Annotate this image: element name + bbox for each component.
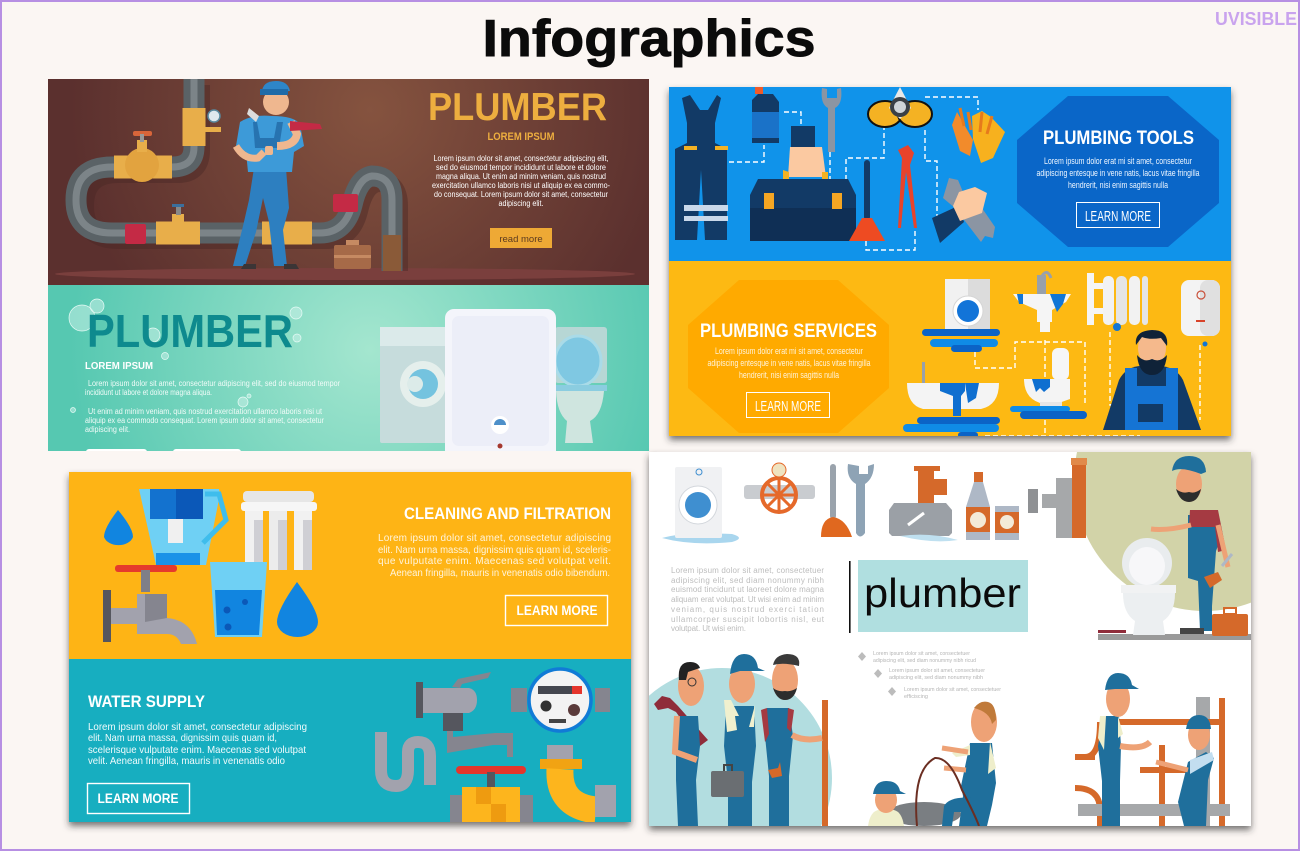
- icon: bathtub with puddle: [903, 362, 1000, 438]
- icon: S-trap pipe: [381, 732, 430, 786]
- icon: boiler: [1181, 280, 1220, 346]
- panel: cleaning and filtration yellow banner: [69, 472, 631, 659]
- button: learn more: LEARN MORE: [516, 603, 598, 618]
- text block: water supply body: scelerisque vulputate enim. Maecenas sed volutpat: [88, 744, 306, 756]
- text block: filtration body: Lorem ipsum dolor sit amet, consectetur adipiscing: [378, 533, 611, 544]
- text block: mint banner body: Lorem ipsum dolor sit amet, consectetur adipiscing elit, sed do eiusmod tempor: [88, 379, 340, 388]
- icon: overalls: [675, 95, 728, 240]
- text block: plumber paragraph: adipiscing elit, sed diam nonummy nibh: [671, 576, 824, 585]
- icon: respirator mask: [868, 87, 932, 127]
- heading: PLUMBING SERVICES: PLUMBING SERVICES: [700, 321, 877, 342]
- icon: gold valve bottom: [172, 204, 184, 222]
- text block: plumber paragraph: volutpat. Ut wisi enim.: [671, 624, 746, 633]
- subheading: LOREM IPSUM: LOREM IPSUM: [488, 131, 554, 143]
- text block: plumber paragraph: Lorem ipsum dolor sit amet, consectetuer: [671, 566, 824, 575]
- panel: water supply teal banner: [69, 659, 631, 822]
- button: read more: read more: [499, 234, 543, 245]
- icon: yellow elbow pipe: [540, 745, 616, 817]
- text block: brown banner body: sed do eiusmod tempor incididunt ut labore et dolore: [436, 163, 606, 172]
- illustration: team of three plumbers: [654, 654, 828, 826]
- text block: brown banner body: Lorem ipsum dolor sit amet, consectetur adipiscing elit,: [434, 154, 608, 163]
- text block: brown banner body: do consequat. Lorem ipsum dolor sit amet, consectetur: [434, 190, 608, 199]
- text block: filtration body: Aenean fringilla, mauris in venenatis odio bibendum.: [390, 568, 610, 579]
- icon: red handle valve: [450, 766, 533, 822]
- text block: plumber paragraph: aliquam erat volutpat. Ut wisi enim ad minim: [671, 595, 824, 604]
- connectors: dashed lines: [729, 97, 978, 250]
- text block: mint banner body: incididunt ut labore et dolore magna aliqua.: [85, 388, 212, 397]
- icon: gloves: [952, 108, 1005, 163]
- icon: washing machine: [662, 467, 739, 543]
- button: learn more: LEARN MORE: [755, 398, 821, 415]
- icon: gray spout tap: [416, 672, 513, 757]
- icon: bearded plumber: [1103, 330, 1201, 430]
- icon: small drop: [104, 510, 133, 545]
- list: diamond bullet notes: efficiscing: [904, 694, 928, 700]
- text block: plumber paragraph: veniam, quis nostrud exerci tation: [671, 605, 824, 614]
- connectors: dashed lines: [975, 332, 1200, 436]
- heading: PLUMBING TOOLS: PLUMBING TOOLS: [1043, 128, 1194, 149]
- button: learn more: [1076, 202, 1160, 228]
- icon: washing machine with puddle: [922, 279, 1000, 352]
- heading: CLEANING AND FILTRATION: CLEANING AND FILTRATION: [404, 504, 611, 523]
- illustration: plumber at toilet: [1098, 456, 1251, 640]
- text block: mint banner body: Ut enim ad minim veniam, quis nostrud exercitation ullamco laboris nisi ut: [88, 407, 323, 416]
- buttons: cropped white: [86, 449, 241, 451]
- text block: tools body: hendrerit, nisi enim sagittis nulla: [1068, 180, 1169, 191]
- panel: plumber flat illustration poster: [612, 349, 1300, 851]
- illustration: washing machine: [380, 327, 448, 443]
- icon: hand with wrench: [932, 178, 995, 243]
- text block: services body: [708, 346, 871, 381]
- text block: filtration body: que vulputate enim. Maecenas sed volutpat velit.: [378, 556, 611, 567]
- icon: red clamps: [125, 194, 358, 244]
- illustration: white water heater: [445, 309, 556, 459]
- icon: pressure gauge: [205, 110, 221, 132]
- title label: plumber: plumber: [864, 570, 1021, 616]
- heading: PLUMBER teal: PLUMBER: [87, 305, 293, 357]
- text block: water supply body: Lorem ipsum dolor sit amet, consectetur adipiscing: [88, 721, 307, 733]
- panel: plumbing tools blue banner: [669, 87, 1231, 261]
- panel: brown plumber banner: [48, 79, 649, 285]
- icon: pipe fittings: [1028, 458, 1087, 538]
- text block: water supply body: velit. Aenean fringilla, mauris in venenatis odio: [88, 755, 285, 767]
- panel: mint plumber banner: [48, 285, 649, 459]
- text block: mint banner body: [85, 379, 340, 434]
- panel: cleaning and water supply: [69, 472, 631, 822]
- illustration: toilet: [553, 327, 607, 443]
- logo: UVISIBLE: UVISIBLE: [1215, 9, 1297, 29]
- icon: toilet with puddle: [1010, 348, 1087, 419]
- icon: orange valve on pipe: [744, 463, 815, 512]
- illustration: worker at manhole: [868, 702, 997, 826]
- panel: plumbing tools and services: [669, 87, 1231, 438]
- text block: services body: Lorem ipsum dolor erat mi sit amet, consectetur: [715, 346, 863, 357]
- illustration: pipe network: [76, 79, 398, 271]
- text block: mint banner body: adipiscing elit.: [85, 425, 130, 434]
- button: read more: [490, 228, 552, 248]
- text block: brown banner body: exercitation ullamco laboris nisi ut aliquip ex ea commo-: [432, 181, 610, 190]
- icon: wrench: [848, 464, 874, 536]
- button: learn more: LEARN MORE: [1085, 208, 1151, 225]
- list: diamond bullet notes: adipiscing elit, sed diam nonummy nibh: [889, 675, 983, 681]
- heading: PLUMBER: PLUMBER: [428, 86, 607, 129]
- text block: services body: hendrerit, nisi enim sagittis nulla: [739, 370, 840, 381]
- icon: plunger: [821, 464, 852, 537]
- text block: water supply body: elit. Nam urna massa, dignissim quis quam id,: [88, 732, 277, 744]
- icon: water meter: [511, 669, 610, 731]
- badge: orange octagon: [688, 280, 889, 433]
- text block: tools body: [1036, 156, 1200, 191]
- icon: water filter cartridges: [241, 491, 317, 570]
- button: learn more: LEARN MORE: [98, 791, 178, 806]
- button: learn more: [506, 596, 608, 626]
- list: diamond bullet notes: Lorem ipsum dolor sit amet, consectetuer: [904, 687, 1001, 693]
- text block: services body: adipiscing entesque in vene natis, lacus vitae fringilla: [708, 358, 871, 369]
- text block: filtration body: [378, 533, 611, 579]
- text block: plumber paragraph: euismod tincidunt ut laoreet dolore magna: [671, 585, 825, 594]
- icon: cleaner can: [995, 506, 1019, 540]
- text block: filtration body: elit. Nam urna massa, dignissim quis quam id, sceleris-: [378, 545, 611, 556]
- badge: blue octagon: [1017, 96, 1219, 247]
- subheading: LOREM IPSUM: LOREM IPSUM: [85, 360, 153, 372]
- icon: wrench gray: [822, 88, 841, 152]
- button: learn more: [746, 392, 830, 418]
- illustration: two workers fitting pipes: [1075, 673, 1230, 826]
- icon: red pliers: [898, 145, 917, 228]
- list: diamond bullet notes: adipiscing elit, sed diam nonummy nibh ricud: [873, 658, 976, 664]
- text block: tools body: Lorem ipsum dolor erat mi sit amet, consectetur: [1044, 156, 1192, 167]
- icon: gold valve top: [125, 131, 159, 182]
- icon: plunger: [849, 160, 885, 241]
- icon: hand holding toolbox: [750, 126, 856, 241]
- text block: plumber paragraph: ullamcorper suscipit lobortis nisl, eut: [671, 615, 825, 624]
- list: diamond bullet notes: Lorem ipsum dolor sit amet, consectetuer: [873, 651, 970, 657]
- icon: chemical bottle: [752, 87, 779, 143]
- text block: mint banner body: aliquip ex ea commodo consequat. Lorem ipsum dolor sit amet, consectetur: [85, 416, 324, 425]
- list: diamond bullet notes: [858, 651, 1001, 700]
- icon: large drop: [277, 582, 318, 637]
- icon: brown toolbox: [334, 240, 371, 269]
- text block: tools body: adipiscing entesque in vene natis, lacus vitae fringilla: [1036, 168, 1200, 179]
- icon: cleaner bottle: [966, 472, 990, 540]
- text block: brown banner body: magna aliqua. Ut enim ad minim veniam, quis nostrud: [436, 172, 606, 181]
- text block: brown banner body: adipiscing elit.: [498, 199, 544, 208]
- button: learn more: [88, 784, 190, 814]
- panel: plumber banners (brown and mint): [48, 79, 649, 459]
- list: diamond bullet notes: Lorem ipsum dolor sit amet, consectetuer: [889, 668, 985, 674]
- illustration: bubbles: [69, 299, 302, 412]
- icon: tap with red handle: [103, 565, 197, 644]
- icon: filter pitcher: [139, 489, 226, 565]
- text block: plumber paragraph: [671, 566, 825, 633]
- illustration: plumber with wrench: [233, 81, 322, 269]
- text block: water supply body: [88, 721, 307, 767]
- icon: glass of water: [210, 562, 267, 637]
- panel: plumbing services yellow banner: [688, 271, 1220, 436]
- heading: WATER SUPPLY: WATER SUPPLY: [88, 692, 206, 711]
- title: Infographics: [482, 10, 816, 68]
- background shape: light blue circle: [612, 668, 832, 851]
- icon: toolbox with pipe fitting: [889, 466, 958, 541]
- icon: leaking sink: [1013, 272, 1071, 332]
- text block: brown banner body: [432, 154, 610, 208]
- background shape: olive circle: [1074, 349, 1300, 611]
- icon: radiator: [1087, 273, 1148, 331]
- title label: plumber: [849, 560, 1028, 633]
